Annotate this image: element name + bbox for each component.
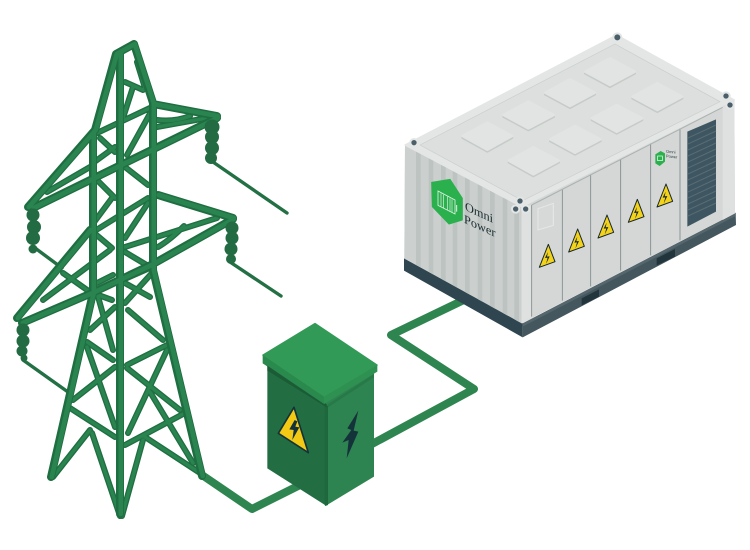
door lines (532, 129, 680, 317)
battery container (404, 33, 736, 337)
transformer box (263, 323, 377, 506)
box left face (267, 365, 326, 506)
vent grille (687, 119, 716, 227)
warning triangles (539, 184, 673, 267)
base pockets (582, 289, 599, 305)
small door logo: Omni (666, 149, 676, 155)
small door logo: Power (666, 153, 678, 160)
icon: warning 2 (569, 229, 584, 252)
container base (404, 213, 736, 337)
logo: Omni Power hexagon (432, 179, 462, 224)
roof panels (463, 58, 682, 174)
icon: warning triangle (278, 407, 308, 453)
roof panel shadows (463, 60, 682, 176)
brand text (464, 199, 496, 240)
cable: transformer to container (372, 297, 474, 444)
icon: warning 4 (628, 199, 644, 222)
icon: lightning bolt (342, 411, 358, 458)
insulators (16, 120, 238, 362)
icon: warning 3 (598, 215, 614, 238)
brand text: Power (464, 211, 496, 240)
icon: warning 5 (657, 184, 673, 207)
hatch panel (538, 203, 553, 230)
icon: battery (438, 191, 457, 214)
box lid (263, 323, 377, 397)
transmission tower (16, 44, 287, 516)
box right face (326, 373, 374, 506)
icon: warning 1 (539, 244, 555, 267)
container right face (522, 100, 735, 323)
overhead wires (23, 162, 287, 392)
container left face (404, 146, 522, 324)
corner fittings (410, 33, 734, 213)
container roof (405, 33, 734, 213)
cable: tower to transformer (202, 475, 300, 509)
ribs (416, 152, 519, 322)
small door logo (655, 149, 678, 166)
brand text: Omni (465, 199, 493, 226)
tower lattice (17, 44, 234, 516)
